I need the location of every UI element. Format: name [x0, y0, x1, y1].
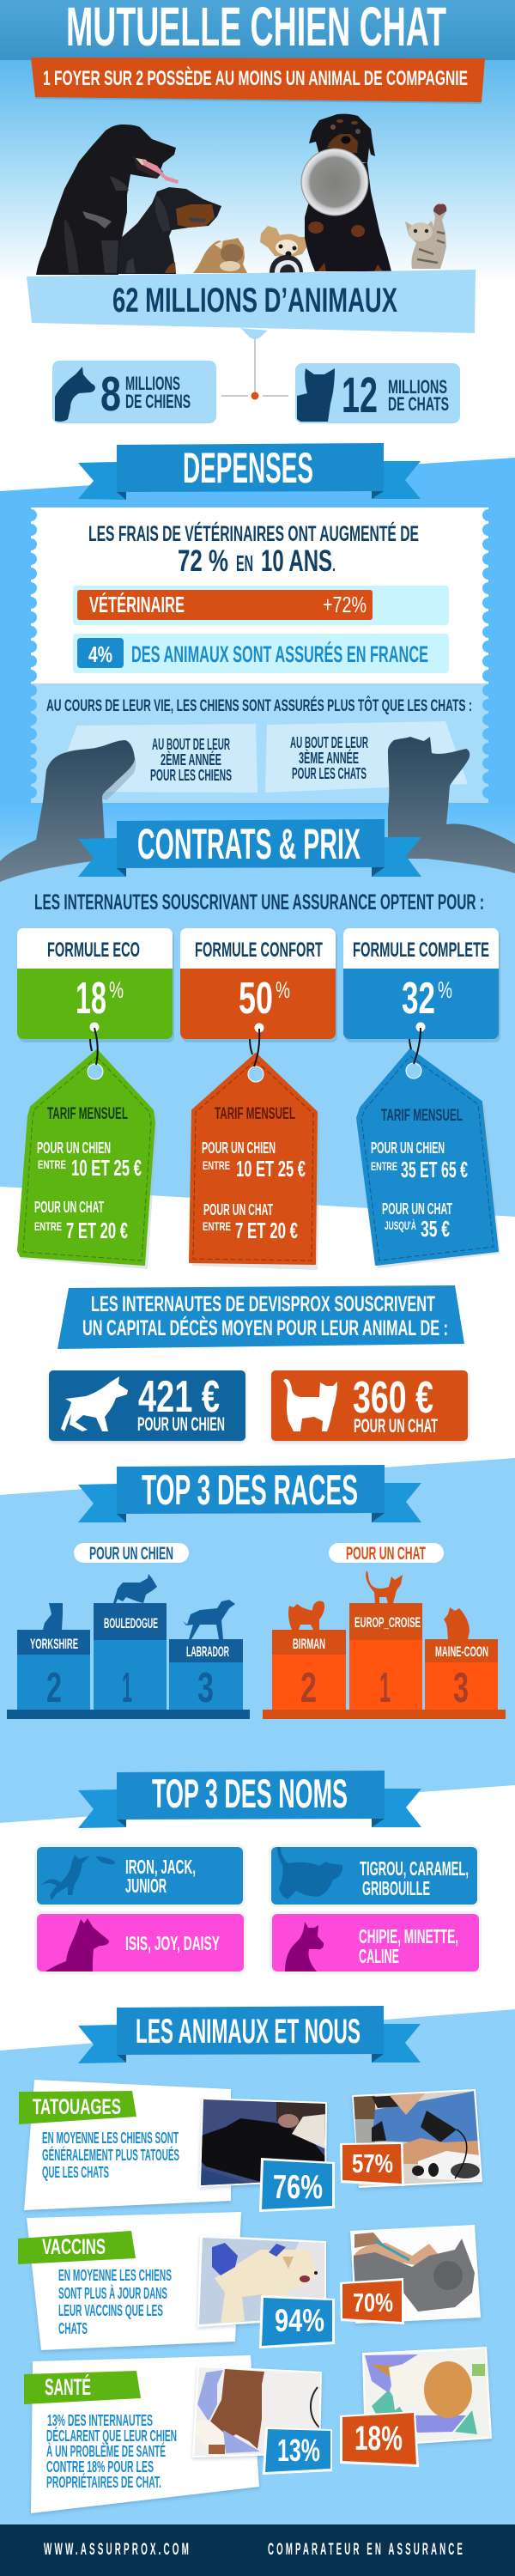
icon: dog head: [55, 367, 95, 422]
text: sante: DÉCLARENT QUE LEUR CHIEN: [46, 2427, 177, 2445]
column: yorkshire: 2: [46, 1665, 62, 1711]
stat card: 8 millions de chiens: DE CHIENS: [125, 391, 191, 412]
card: 360 euros: POUR UN CHAT: [354, 1415, 438, 1437]
bar: veterinaire: [73, 586, 449, 625]
stat card: 8 millions de chiens: MILLIONS: [125, 373, 180, 394]
photo group: dogs and cats: [36, 114, 446, 275]
ribbon: depenses: DEPENSES: [183, 444, 313, 492]
label: tatouages: [19, 2091, 136, 2124]
price tag: confort: ENTRE: [203, 1219, 231, 1233]
pill: pour un chien: POUR UN CHIEN: [89, 1544, 173, 1564]
text: vaccins: LEUR VACCINS QUE LES: [58, 2302, 163, 2319]
card: formule eco: FORMULE ECO: [47, 939, 140, 962]
card: 421 euros: POUR UN CHIEN: [137, 1413, 225, 1435]
text: sante: 13% DES INTERNAUTES: [47, 2412, 153, 2429]
name card: female cats: [270, 1911, 482, 1974]
card: formule confort: %: [276, 977, 290, 1003]
badge: 94%: [259, 2295, 335, 2348]
background: races section: [0, 1458, 515, 1823]
ribbon: les animaux et nous: [78, 2006, 421, 2063]
icon: cat sitting: [285, 1922, 324, 1971]
card: 421 euros: 421 €: [138, 1372, 220, 1422]
podium: dogs: [7, 1574, 250, 1719]
panel: tatouages: [19, 2080, 231, 2210]
card: 421 euros: [49, 1370, 245, 1441]
bar: 4% assures: [73, 634, 449, 673]
price tag: eco: POUR UN CHAT: [34, 1199, 104, 1216]
panel: cats after 3 years: 3ÈME ANNÉE: [299, 749, 359, 767]
background: white section: [0, 1187, 515, 1537]
photo: microchip cat: [348, 2087, 489, 2190]
card: formule confort: FORMULE CONFORT: [195, 939, 323, 962]
background: contrats light section: [0, 803, 515, 1217]
text: tatouages: QUE LES CHATS: [42, 2164, 109, 2181]
stat card: 8 millions de chiens: 8: [100, 367, 121, 422]
text: vaccins: SONT PLUS À JOUR DANS: [58, 2284, 167, 2302]
panel: dogs after 2 years: [52, 724, 258, 793]
background: depenses blue section: [0, 458, 515, 807]
banner: capital deces: [58, 1285, 464, 1349]
footer: WWW.ASSURPROX.COM: [44, 2541, 191, 2559]
icon: dog jumping: [41, 1855, 115, 1900]
text: tatouages: [42, 2129, 179, 2181]
card: formule complete: %: [438, 977, 452, 1003]
card: formule complete: 32: [402, 974, 435, 1024]
silhouette: dog: [0, 740, 136, 882]
bar: 4% assures: 4%: [88, 641, 112, 667]
key figure: 72 %: [178, 544, 228, 578]
icon: dog sitting: [45, 1918, 109, 1971]
key figure: 10 ANS: [261, 544, 332, 578]
text: vaccins: [58, 2267, 172, 2337]
panel: dogs after 2 years: 2ÈME ANNÉE: [161, 750, 221, 769]
panel: cats after 3 years: [265, 721, 468, 793]
text: tatouages: GÉNÉRALEMENT PLUS TATOUÉS: [42, 2146, 179, 2164]
price tag: complete: 35 €: [421, 1216, 450, 1242]
text: tatouages: EN MOYENNE LES CHIENS SONT: [42, 2129, 179, 2147]
pill: pour un chat: [329, 1543, 444, 1564]
text: sante: [46, 2412, 177, 2491]
panel: sante: [24, 2355, 259, 2513]
ribbon: depenses: [78, 443, 421, 500]
string: [250, 1029, 259, 1066]
text: vaccins: EN MOYENNE LES CHIENS: [58, 2267, 172, 2284]
column: labrador: 3: [197, 1665, 214, 1711]
label: sante: [24, 2371, 141, 2404]
price tag: confort: POUR UN CHIEN: [202, 1139, 276, 1157]
badge: 76%: 76%: [273, 2169, 323, 2206]
badge: 13%: 13%: [277, 2433, 320, 2468]
text: vaccins: CHATS: [58, 2320, 88, 2337]
price tag: complete: TARIF MENSUEL: [381, 1107, 463, 1125]
background: animals and us section: [0, 2009, 515, 2529]
ribbon: top 3 des races: TOP 3 DES RACES: [142, 1467, 358, 1514]
key figure: EN: [236, 550, 253, 576]
price tag: complete: 35 ET 65 €: [401, 1157, 468, 1182]
card: formule confort: 50: [239, 974, 273, 1024]
column: maine coon: 3: [453, 1665, 469, 1711]
text: sante: À UN PROBLÈME DE SANTÉ: [46, 2442, 166, 2460]
column: bouledogue: 1: [122, 1665, 132, 1711]
column: bouledogue: BOULEDOGUE: [104, 1615, 158, 1631]
name card: male dogs: [34, 1844, 245, 1907]
label: vaccins: VACCINS: [42, 2235, 106, 2259]
column: maine coon: [425, 1607, 498, 1711]
price tag: complete: POUR UN CHAT: [382, 1200, 452, 1218]
price tag: confort: POUR UN CHAT: [203, 1201, 273, 1218]
footer: [0, 2524, 515, 2576]
stat card: 12 millions de chats: MILLIONS: [388, 376, 447, 398]
icon: cat head: [297, 368, 335, 422]
ribbon: top 3 des races: [78, 1465, 421, 1522]
photo: ginger cat with bandage: [360, 2347, 493, 2446]
bar: veterinaire: +72%: [323, 592, 367, 617]
icon: white dog: [61, 1376, 128, 1431]
price tag: complete: POUR UN CHIEN: [371, 1139, 445, 1157]
black labrador: [36, 125, 179, 275]
card: 360 euros: 360 €: [353, 1373, 433, 1423]
price tag: confort: ENTRE: [203, 1158, 230, 1172]
pill: pour un chat: POUR UN CHAT: [346, 1544, 426, 1564]
subtitle banner: [31, 58, 485, 104]
price tag: confort: TARIF MENSUEL: [215, 1105, 295, 1123]
column: europeen croise: EUROP_CROISE: [354, 1614, 421, 1631]
panel: 62 millions d'animaux: [27, 270, 476, 339]
badge: 57%: 57%: [352, 2148, 393, 2178]
ribbon: contrats et prix: [78, 819, 421, 877]
chihuahua with bowl: [260, 226, 309, 273]
badge: 18%: [340, 2411, 419, 2467]
column: europeen croise: [349, 1571, 422, 1711]
badge: 57%: [340, 2142, 404, 2186]
name card: female dogs: ISIS, JOY, DAISY: [125, 1932, 220, 1954]
silhouette: cat: [388, 737, 515, 873]
key figure: .: [332, 556, 336, 575]
text: sante: CONTRE 18% POUR LES: [46, 2458, 154, 2476]
podium: cats: [263, 1571, 506, 1719]
stat card: 12 millions de chats: DE CHATS: [388, 393, 449, 415]
price tag: complete: ENTRE: [371, 1159, 397, 1173]
bar: veterinaire: VÉTÉRINAIRE: [89, 592, 185, 617]
card: 360 euros: [271, 1370, 468, 1441]
scalloped edges: [31, 515, 488, 799]
price tag: complete: JUSQU'À: [385, 1218, 416, 1232]
photo: sharpei with bandage: [192, 2361, 325, 2460]
label: vaccins: [18, 2231, 136, 2264]
ribbon: top 3 des noms: TOP 3 DES NOMS: [152, 1771, 348, 1816]
card: formule eco: %: [109, 977, 124, 1003]
column: birman: [272, 1601, 346, 1711]
badge: 76%: [259, 2158, 335, 2212]
key figure: [178, 544, 336, 578]
name card: male dogs: JUNIOR: [125, 1874, 167, 1897]
column: birman: BIRMAN: [293, 1636, 325, 1652]
badge: 18%: 18%: [354, 2420, 403, 2458]
badge: 70%: 70%: [353, 2287, 393, 2318]
rottweiler holding bowl: [300, 114, 391, 271]
pill: pour un chien: [74, 1543, 189, 1564]
card: formule complete: [343, 928, 500, 1042]
badge: 70%: [340, 2278, 404, 2324]
doberman: [118, 187, 221, 274]
column: yorkshire: YORKSHIRE: [30, 1636, 78, 1652]
photo: grey cat vaccine: [348, 2224, 485, 2327]
badge: 13%: [263, 2427, 332, 2475]
string: [409, 1028, 421, 1064]
panel: cats after 3 years: POUR LES CHATS: [292, 765, 367, 782]
panel: veterinary costs: [31, 507, 488, 803]
price tag: eco: ENTRE: [34, 1219, 62, 1233]
grey kitten: [405, 204, 446, 269]
stat card: 12 millions de chats: 12: [342, 368, 378, 423]
name card: male dogs: IRON, JACK,: [125, 1856, 196, 1878]
connector lines: [221, 339, 288, 400]
card: formule confort: [180, 928, 337, 1042]
photo: puppy vaccine: [197, 2233, 330, 2327]
string: [90, 1028, 98, 1065]
background: sky gradient: [0, 60, 515, 283]
stat card: 12 millions de chats: [295, 363, 460, 423]
price tag: eco: POUR UN CHIEN: [37, 1139, 111, 1157]
price tag: confort: 10 ET 25 €: [236, 1156, 306, 1182]
label: tatouages: TATOUAGES: [33, 2095, 121, 2119]
panel: insured earlier background: [31, 683, 488, 803]
name card: male cats: [269, 1844, 480, 1907]
panel: dogs after 2 years: POUR LES CHIENS: [150, 767, 232, 784]
header band: [0, 0, 515, 60]
photo: black dog tattoo: [197, 2095, 330, 2190]
column: europeen croise: 1: [379, 1665, 391, 1711]
icon: cat running: [277, 1847, 342, 1899]
price tag: eco: ENTRE: [38, 1157, 66, 1171]
icon: white cat: [283, 1379, 337, 1431]
column: yorkshire: [17, 1603, 90, 1711]
label: sante: SANTÉ: [45, 2373, 91, 2400]
name card: female dogs: [34, 1911, 246, 1974]
panel: vaccins: [18, 2212, 241, 2350]
ginger cat: [193, 238, 247, 273]
price tag: complete: [357, 1028, 500, 1268]
price tag: eco: 7 ET 20 €: [66, 1218, 128, 1243]
column: labrador: LABRADOR: [186, 1643, 229, 1660]
column: labrador: [169, 1600, 243, 1711]
panel: dogs after 2 years: AU BOUT DE LEUR: [152, 736, 230, 753]
column: birman: 2: [300, 1665, 317, 1711]
price tag: confort: 7 ET 20 €: [235, 1218, 298, 1243]
name card: female cats: CALINE: [359, 1945, 399, 1967]
price tag: eco: [18, 1028, 157, 1269]
name card: male cats: GRIBOUILLE: [362, 1877, 430, 1899]
text: sante: PROPRIÉTAIRES DE CHAT.: [46, 2473, 161, 2491]
price tag: eco: TARIF MENSUEL: [47, 1105, 128, 1123]
price tag: eco: 10 ET 25 €: [71, 1155, 142, 1181]
panel: cats after 3 years: AU BOUT DE LEUR: [290, 734, 368, 751]
stat card: 8 millions de chiens: [52, 361, 216, 423]
card: formule eco: [17, 928, 174, 1042]
badge: 94%: 94%: [275, 2303, 324, 2338]
column: bouledogue: [94, 1574, 167, 1711]
ribbon: top 3 des noms: [78, 1771, 421, 1828]
price tag: confort: [190, 1029, 320, 1270]
card: formule eco: 18: [76, 974, 106, 1024]
